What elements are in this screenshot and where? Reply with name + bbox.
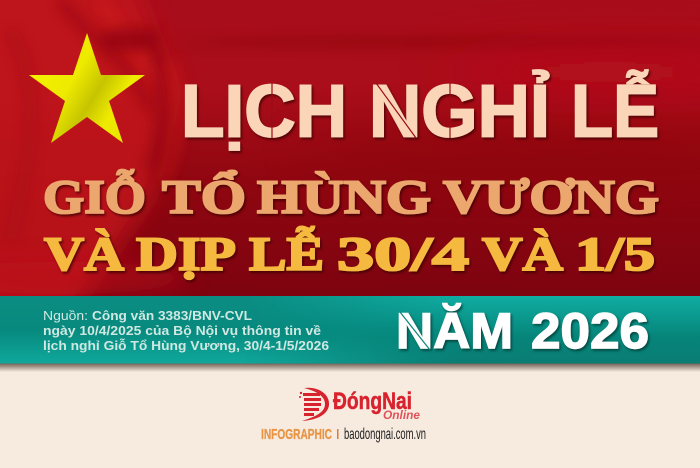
heading: VÀ DỊP LỄ 30/4 VÀ 1/5 xyxy=(44,225,655,281)
footer: site credit: INFOGRAPHIC xyxy=(261,426,332,443)
panel: teal band xyxy=(0,296,700,372)
footer: site credit xyxy=(261,426,426,443)
heading: GIỖ TỔ HÙNG VƯƠNG: TỔ xyxy=(162,169,246,224)
heading: GIỖ TỔ HÙNG VƯƠNG: GIỖ xyxy=(43,168,146,224)
text block: source note: lịch nghỉ Giỗ Tổ Hùng Vương, 30/4-1/5/2026 xyxy=(43,338,329,353)
heading: LỊCH NGHỈ LỄ: LỊCH xyxy=(181,70,347,152)
heading: VÀ DỊP LỄ 30/4 VÀ 1/5: VÀ xyxy=(482,228,563,281)
text block: source note: Công văn 3383/BNV-CVL xyxy=(92,308,252,323)
footer: site credit: baodongnai.com.vn xyxy=(344,426,426,443)
stencil cuts in heading xyxy=(272,83,450,138)
heading: VÀ DỊP LỄ 30/4 VÀ 1/5: DỊP xyxy=(136,228,236,281)
heading: LỊCH NGHỈ LỄ: NGHỈ xyxy=(369,70,550,152)
heading: LỊCH NGHỈ LỄ: LỄ xyxy=(571,70,659,152)
icon: yellow star xyxy=(29,33,145,143)
logo: Đồng Nai Online xyxy=(299,388,420,422)
logo wordmark: ĐóngNai xyxy=(333,388,412,415)
stencil cut in NĂM xyxy=(400,312,430,350)
heading: NĂM 2026: 2026 xyxy=(531,303,649,359)
heading: NĂM 2026 xyxy=(396,303,649,359)
heading: VÀ DỊP LỄ 30/4 VÀ 1/5: 1/5 xyxy=(575,228,655,281)
text block: source note: Nguồn: xyxy=(43,308,88,323)
heading: GIỖ TỔ HÙNG VƯƠNG xyxy=(43,168,659,224)
heading: VÀ DỊP LỄ 30/4 VÀ 1/5: 30/4 xyxy=(337,228,469,281)
logo subtitle: Online xyxy=(383,408,420,422)
text block: source note: ngày 10/4/2025 của Bộ Nội vụ thông tin về xyxy=(43,323,321,338)
heading: NĂM 2026: NĂM xyxy=(396,303,513,359)
heading: VÀ DỊP LỄ 30/4 VÀ 1/5: LỄ xyxy=(249,225,324,281)
red flag background xyxy=(0,0,700,296)
heading: LỊCH NGHỈ LỄ xyxy=(181,70,659,152)
heading: GIỖ TỔ HÙNG VƯƠNG: VƯƠNG xyxy=(443,171,659,224)
text block: source note xyxy=(43,308,329,353)
heading: GIỖ TỔ HÙNG VƯƠNG: HÙNG xyxy=(257,170,431,224)
icon: logo emblem xyxy=(299,388,329,421)
heading: VÀ DỊP LỄ 30/4 VÀ 1/5: VÀ xyxy=(44,228,124,281)
